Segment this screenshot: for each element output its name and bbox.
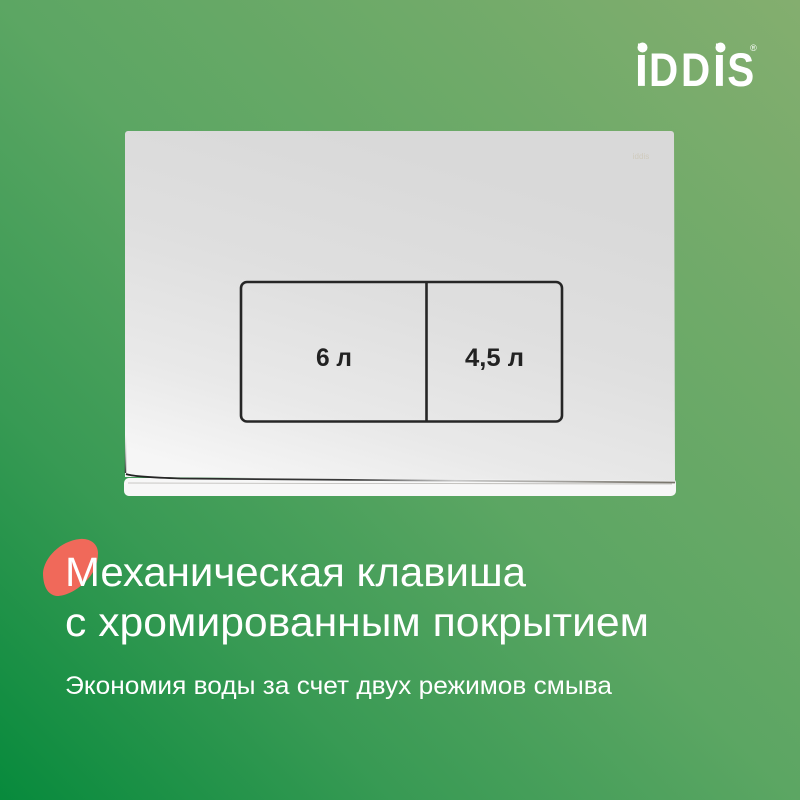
title: с хромированным покрытием bbox=[65, 599, 649, 645]
subtitle: Экономия воды за счет двух режимов смыва bbox=[65, 672, 612, 700]
button label: 6 л: 6 л bbox=[316, 344, 352, 372]
logo: iDDiS bbox=[634, 35, 757, 99]
flush plate product bbox=[124, 131, 676, 496]
logo: iDDiS: ® bbox=[750, 43, 757, 53]
plate bottom edge highlight bbox=[126, 474, 675, 482]
accent blob bbox=[43, 539, 98, 596]
title bbox=[65, 549, 649, 645]
plate bottom lip bbox=[124, 478, 676, 496]
button label: 4,5 л: 4,5 л bbox=[465, 344, 524, 372]
title: Механическая клавиша bbox=[65, 549, 526, 595]
logo wordmark: D bbox=[681, 44, 710, 97]
plate face bbox=[125, 131, 675, 481]
logo wordmark: D bbox=[649, 44, 678, 97]
logo wordmark: i bbox=[713, 35, 726, 99]
plate brand mark: iddis bbox=[633, 152, 649, 161]
button outline frame bbox=[241, 282, 562, 422]
logo wordmark: S bbox=[727, 44, 754, 97]
lip groove line bbox=[128, 483, 672, 484]
logo wordmark: i bbox=[634, 35, 648, 99]
plate left edge reflection bbox=[124, 435, 126, 473]
